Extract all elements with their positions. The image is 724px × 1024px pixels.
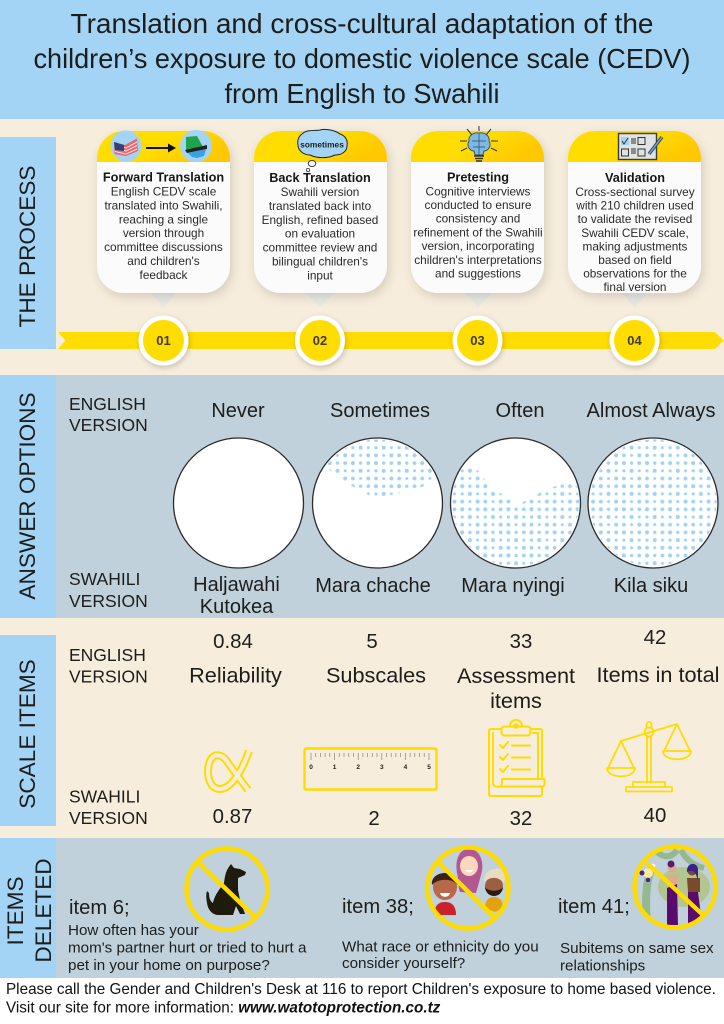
card: pretesting: conducted to ensure bbox=[425, 198, 532, 212]
card: validation: observations for the bbox=[583, 267, 687, 281]
title bbox=[0, 0, 724, 119]
option: never: Kutokea bbox=[200, 596, 274, 618]
icon: ruler bbox=[304, 748, 436, 790]
option: often: Mara nyingi bbox=[461, 575, 565, 597]
stat: subscales bbox=[304, 631, 436, 830]
icon: thought cloud: sometimes bbox=[300, 140, 344, 150]
title: from English to Swahili bbox=[224, 78, 500, 109]
icon: balance scale bbox=[607, 722, 691, 792]
option: almost always bbox=[585, 400, 721, 597]
card: validation: to validate the revised bbox=[578, 212, 692, 226]
stat: items in total bbox=[597, 627, 719, 827]
panel: items deleted bbox=[0, 838, 716, 978]
option: almost always: Kila siku bbox=[614, 575, 688, 597]
label: english version bbox=[69, 645, 148, 686]
card: forward translation: Forward Translation bbox=[103, 170, 224, 184]
deleted item 38: What race or ethnicity do you bbox=[342, 938, 539, 956]
card: forward translation: reaching a single bbox=[119, 212, 209, 226]
card: back translation bbox=[254, 129, 387, 308]
step marker 02 bbox=[295, 316, 345, 366]
stat: reliability: 0.87 bbox=[213, 806, 252, 828]
stat: assessment items: 32 bbox=[510, 808, 532, 830]
label: swahili version: SWAHILI bbox=[69, 569, 140, 589]
stat: items in total: 42 bbox=[644, 627, 666, 649]
stat: items in total: 40 bbox=[644, 805, 666, 827]
card: pretesting: consistency and bbox=[436, 212, 520, 226]
label: swahili version: VERSION bbox=[69, 808, 148, 828]
label: english version bbox=[69, 394, 148, 435]
card: back translation: committee review and bbox=[263, 241, 377, 255]
card: pretesting: version, incorporating bbox=[422, 239, 534, 253]
step marker 04: 04 bbox=[627, 333, 642, 348]
card: validation: Validation bbox=[605, 171, 665, 185]
title: children’s exposure to domestic violence scale (CEDV) bbox=[34, 43, 690, 74]
stat: subscales: 2 bbox=[368, 808, 380, 830]
step marker 01: 01 bbox=[156, 333, 171, 348]
card: back translation: input bbox=[307, 268, 334, 282]
card: pretesting: and suggestions bbox=[435, 266, 521, 280]
option: almost always: Almost Always bbox=[587, 400, 715, 422]
icon: ruler: 4 bbox=[404, 764, 408, 771]
icon: thought cloud bbox=[298, 129, 347, 172]
option: never: Never bbox=[211, 400, 265, 422]
icon: ruler: 0 bbox=[309, 764, 313, 771]
card: back translation: translated back into bbox=[269, 199, 372, 213]
icon: prohibited people bbox=[428, 848, 508, 928]
stat: assessment items: Assessment bbox=[457, 663, 575, 688]
option: never: Haljawahi bbox=[193, 574, 280, 596]
stat: reliability: 0.84 bbox=[213, 631, 253, 653]
heading: the process bbox=[0, 137, 56, 349]
card: pretesting bbox=[411, 126, 544, 308]
label: swahili version bbox=[69, 786, 148, 828]
option: never bbox=[174, 400, 304, 618]
stat: assessment items: 33 bbox=[510, 631, 532, 653]
footer note: Visit our site for more information: www.watotoprotection.co.tz bbox=[6, 1000, 441, 1016]
icon: clipboard checklist bbox=[489, 720, 544, 796]
card: pretesting: refinement of the Swahili bbox=[413, 225, 543, 239]
card: pretesting: Pretesting bbox=[447, 170, 509, 184]
icon: ruler: 5 bbox=[427, 764, 431, 771]
card: back translation: Back Translation bbox=[269, 171, 371, 185]
stat: subscales: 5 bbox=[366, 631, 378, 653]
card: back translation: on evaluation bbox=[285, 227, 355, 241]
card: back translation: bilingual children's bbox=[272, 254, 368, 268]
deleted item 41: item 41; bbox=[558, 896, 630, 918]
panel: the process bbox=[0, 126, 724, 366]
card: pretesting: Cognitive interviews bbox=[426, 184, 531, 198]
footer note: Please call the Gender and Children's Desk at 116 to report Children's exposure to home based violence. bbox=[6, 981, 716, 998]
deleted item 41: relationships bbox=[560, 958, 646, 974]
heading: items deleted: DELETED bbox=[31, 858, 56, 963]
heading: items deleted: ITEMS bbox=[3, 876, 28, 946]
stat: subscales: Subscales bbox=[326, 663, 426, 688]
card: back translation: English, refined based bbox=[262, 213, 378, 227]
icon: alpha bbox=[208, 751, 249, 790]
deleted item 6 bbox=[68, 848, 307, 974]
deleted item 38: item 38; bbox=[342, 896, 414, 918]
deleted item 6: How often has your bbox=[68, 922, 199, 939]
option: sometimes: Sometimes bbox=[330, 400, 430, 422]
card: forward translation: committee discussions bbox=[104, 240, 223, 254]
footer note bbox=[6, 981, 716, 1016]
option: often bbox=[450, 402, 582, 596]
label: english version: ENGLISH bbox=[69, 394, 146, 414]
stat: assessment items: items bbox=[490, 688, 542, 713]
card: validation bbox=[568, 131, 701, 308]
deleted item 6: item 6; bbox=[69, 897, 130, 919]
card: back translation: Swahili version bbox=[281, 185, 359, 199]
card: pretesting: children's interpretations bbox=[414, 253, 542, 267]
icon: ruler: 1 bbox=[333, 764, 337, 771]
heading: items deleted bbox=[0, 838, 56, 978]
icon: prohibited couple bbox=[634, 846, 716, 928]
heading: answer options bbox=[0, 375, 56, 618]
icon: ruler: 3 bbox=[380, 764, 384, 771]
option: sometimes: Mara chache bbox=[315, 575, 431, 597]
step marker 01 bbox=[138, 316, 188, 366]
panel: scale items bbox=[0, 627, 719, 830]
card: validation: making adjustments bbox=[583, 239, 688, 253]
step marker 03: 03 bbox=[470, 333, 485, 348]
label: english version: VERSION bbox=[69, 666, 148, 686]
stat: items in total: Items in total bbox=[597, 662, 719, 687]
label: english version: VERSION bbox=[69, 415, 148, 435]
deleted item 38 bbox=[342, 848, 539, 972]
label: swahili version: SWAHILI bbox=[69, 786, 140, 806]
card: forward translation: translated into Swahili, bbox=[104, 198, 223, 212]
timeline ribbon bbox=[58, 332, 724, 349]
card: forward translation bbox=[97, 130, 230, 308]
card: validation: Cross-sectional survey bbox=[575, 185, 695, 199]
stat: assessment items bbox=[457, 631, 575, 830]
heading: scale items bbox=[0, 635, 56, 826]
label: swahili version: VERSION bbox=[69, 591, 148, 611]
deleted item 41: Subitems on same sex bbox=[560, 940, 714, 957]
card: forward translation: feedback bbox=[140, 268, 188, 282]
card: validation: Swahili CEDV scale, bbox=[581, 226, 689, 240]
card: forward translation: and children's bbox=[127, 254, 200, 268]
step marker 04 bbox=[610, 316, 660, 366]
card: forward translation: version through bbox=[123, 226, 204, 240]
heading: answer options: ANSWER OPTIONS bbox=[15, 392, 40, 600]
icon: prohibited dog bbox=[186, 848, 268, 930]
heading: the process: THE PROCESS bbox=[15, 166, 40, 327]
card: validation: with 210 children used bbox=[575, 199, 694, 213]
icon: US flag to Tanzania map bbox=[110, 130, 212, 162]
card: validation: final version bbox=[604, 280, 666, 294]
heading: scale items: SCALE ITEMS bbox=[15, 659, 40, 809]
title: Translation and cross-cultural adaptation of the bbox=[70, 8, 654, 39]
step marker 02: 02 bbox=[313, 333, 327, 348]
label: swahili version bbox=[69, 569, 148, 611]
stat: reliability bbox=[189, 631, 282, 828]
label: english version: ENGLISH bbox=[69, 645, 146, 665]
icon: brain light bulb bbox=[460, 126, 498, 161]
option: sometimes bbox=[310, 400, 445, 597]
step marker 03 bbox=[452, 316, 502, 366]
stat: reliability: Reliability bbox=[189, 663, 282, 688]
option: often: Often bbox=[496, 400, 544, 422]
deleted item 6: pet in your home on purpose? bbox=[68, 957, 270, 974]
card: validation: based on field bbox=[598, 253, 672, 267]
deleted item 41 bbox=[558, 846, 716, 974]
icon: ruler: 2 bbox=[356, 764, 360, 771]
panel: answer options bbox=[0, 375, 721, 618]
icon: survey form and pen bbox=[618, 134, 662, 160]
deleted item 38: consider yourself? bbox=[342, 955, 465, 972]
deleted item 6: mom's partner hurt or tried to hurt a bbox=[68, 940, 307, 956]
card: forward translation: English CEDV scale bbox=[111, 184, 217, 198]
